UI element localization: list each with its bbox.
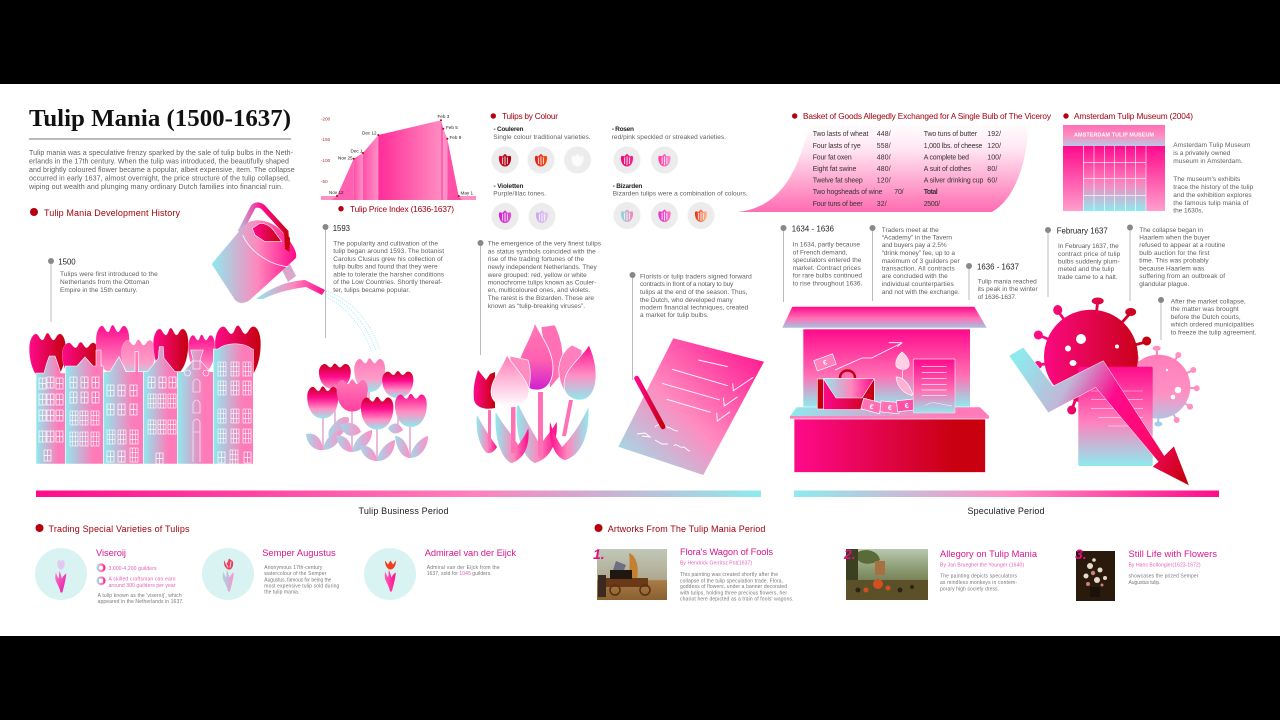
- period bar: speculative: [794, 490, 1219, 516]
- timeline: 1636-1637: Tulip mania reached: [978, 278, 1037, 286]
- title: Tulip Mania (1500-1637): [29, 105, 291, 132]
- item: admirael van der eijck: Admirael van der Eijck: [425, 548, 516, 558]
- falling arrow: [1009, 347, 1189, 486]
- timeline: 1634-1636: 1634 - 1636: [792, 225, 834, 234]
- intro text: occurred in early 1637, almost overnight, the price structure of the tulip collapsed,: [29, 175, 290, 183]
- panel: basket of goods: [738, 111, 1052, 212]
- artwork 2: as mindless monkeys in contem-: [940, 580, 1017, 586]
- period bar: tulip business: [36, 490, 761, 516]
- text: museum description: [1173, 142, 1254, 214]
- timeline: after the collapse: which ordered municipalities: [1170, 322, 1255, 328]
- text: museum description: and the exhibition explores: [1173, 192, 1252, 199]
- chart data points: [336, 119, 460, 197]
- timeline: 1593: able to tolerate the harsher conditions: [333, 271, 445, 278]
- table: left column: Twelve fat sheep: [813, 178, 863, 184]
- illustration: water drops: [326, 291, 380, 352]
- chart axis labels: -200: [321, 116, 331, 122]
- painting: allegory on tulip mania: [846, 549, 928, 600]
- briefcase: [817, 370, 874, 410]
- timeline: 1634-1636: speculators entered the: [793, 257, 862, 264]
- timeline: 1634-1636: [780, 225, 863, 302]
- timeline: traders: Traders meet at the: [882, 227, 939, 234]
- timeline: traders: transaction. All contracts: [882, 266, 955, 272]
- text: rosen: - Rosen: [612, 126, 634, 133]
- timeline: status symbols: The rarest is the Bizarden. These are: [488, 295, 594, 302]
- table: left column: [813, 131, 904, 208]
- timeline: 1636-1637: 1636 - 1637: [977, 262, 1019, 272]
- intro text: [28, 149, 295, 191]
- timeline: February 1637: trade came to a halt.: [1058, 274, 1118, 281]
- icons: colour swatches: [492, 146, 714, 230]
- timeline: 1593: ter, tulips became popular.: [333, 287, 410, 294]
- price tag and notes: €: [905, 403, 909, 410]
- timeline: status symbols: rise of the trading fortunes of the: [488, 256, 584, 263]
- panel: trading special varieties: [35, 524, 516, 605]
- pale tulip: [491, 355, 530, 407]
- table: left column: 480/: [877, 154, 891, 162]
- timeline: status symbols: en, multicoloured ones, and violets.: [488, 287, 590, 294]
- table: left column: 32/: [877, 201, 887, 208]
- price tag and notes: €: [888, 405, 892, 412]
- intro text: erlands in the 17th century. When the tulip was introduced, the beautifully shaped: [29, 158, 289, 166]
- artwork 1: [593, 546, 794, 602]
- text: couleren: - Couleren: [494, 126, 524, 133]
- heading: tulips by colour: Tulips by Colour: [502, 111, 558, 121]
- timeline: traders: [870, 225, 961, 301]
- item: viseroij: A skilled craftsman can earn: [108, 576, 176, 582]
- item: semper augustus: Augustus, famous for being the: [264, 577, 332, 583]
- table: right column: 192/: [987, 131, 1001, 138]
- item: semper augustus: [202, 548, 340, 600]
- heading: artworks: Artworks From The Tulip Mania Period: [608, 524, 765, 534]
- timeline: February 1637: meted and the tulip: [1058, 266, 1115, 273]
- table: left column: 70/: [894, 189, 904, 196]
- red tulip: [474, 370, 495, 409]
- timeline: forward contracts: [630, 272, 752, 380]
- table: right column: 80/: [987, 166, 997, 173]
- back tulip: [518, 323, 563, 390]
- page background: [0, 84, 1280, 636]
- timeline: 1634-1636: market. Contract prices: [793, 265, 861, 272]
- item: viseroij: Viseroij: [96, 548, 126, 558]
- chart date labels: Dec 1: [350, 148, 363, 154]
- timeline: collapse: suffering from an outbreak of: [1139, 273, 1225, 280]
- text: museum description: is a privately owned: [1173, 150, 1231, 157]
- timeline: traders: are concluded with the: [882, 273, 948, 280]
- timeline: traders: and not with the exchange.: [882, 289, 960, 296]
- artwork 3: [1075, 546, 1217, 601]
- timeline: status symbols: monochrome tulips known as Couler-: [488, 280, 596, 286]
- text: museum description: Amsterdam Tulip Museum: [1173, 142, 1250, 149]
- timeline: forward contracts: modern financial techniques, created: [640, 304, 749, 312]
- item: viseroij: [35, 548, 184, 605]
- text: violetten: Purple/lilac tones.: [493, 190, 546, 198]
- timeline: 1636-1637: its peak in the winter: [978, 286, 1039, 293]
- artwork 1: with tulips, holding three precious flowers, her: [680, 590, 787, 596]
- artwork 2: Allegory on Tulip Mania: [940, 549, 1038, 559]
- artwork 3: 3.: [1075, 546, 1087, 562]
- heading: price index: Tulip Price Index (1636-1637): [350, 204, 454, 214]
- timeline: after the collapse: After the market collapse,: [1171, 298, 1246, 306]
- text: bizarden: - Bizarden: [613, 183, 642, 190]
- item: semper augustus: Semper Augustus: [262, 548, 336, 558]
- period bar: speculative: Speculative Period: [968, 506, 1044, 516]
- heading: development history: Tulip Mania Development History: [44, 208, 180, 218]
- illustration: contract and pen: [618, 338, 764, 475]
- artwork 1: By Hendrick Gerritsz Pot(1637): [680, 560, 752, 566]
- large virus: [1034, 298, 1151, 414]
- timeline: 1593: Carolus Clusius grew his collection of: [333, 256, 443, 263]
- text: rosen: [612, 126, 726, 141]
- heading: museum: Amsterdam Tulip Museum (2004): [1074, 111, 1193, 121]
- timeline: forward contracts: tulips at the end of the season. Thus,: [640, 289, 747, 296]
- price tag and notes: €: [869, 404, 874, 411]
- artwork 1: This painting was created shortly after the: [680, 572, 778, 578]
- illustration: watering can: [212, 205, 325, 303]
- table: right column: Two tuns of butter: [924, 131, 978, 138]
- price tag and notes: [814, 354, 917, 414]
- artwork 3: Still Life with Flowers: [1128, 549, 1217, 559]
- painting: flora's wagon: [597, 549, 667, 600]
- timeline: status symbols: known as “tulip-breaking viruses”.: [488, 303, 585, 310]
- timeline: February 1637: bulbs suddenly plum-: [1058, 258, 1120, 266]
- chart date labels: Feb 5: [446, 125, 458, 130]
- timeline: traders: and buyers pay a 2.5%: [882, 242, 947, 249]
- timeline: 1593: 1593: [333, 224, 350, 233]
- artwork 1: 1.: [593, 546, 605, 562]
- chart axis labels: -50: [321, 179, 328, 184]
- timeline: after the collapse: [1158, 297, 1257, 340]
- timeline: 1593: tulip began around 1593. The botanist: [333, 248, 444, 255]
- small virus: [1126, 346, 1200, 426]
- chart: tulip price index: [321, 114, 476, 200]
- illustration: museum building: [1063, 125, 1165, 211]
- timeline: collapse: [1127, 224, 1226, 301]
- artwork 2: The painting depicts speculators: [940, 574, 1018, 580]
- text: violetten: - Violetten: [494, 183, 524, 190]
- artwork 2: By Jan Brueghel the Younger (1640): [940, 562, 1024, 568]
- chart axis labels: -100: [321, 158, 331, 163]
- text: museum description: trace the history of the tulip: [1173, 184, 1254, 191]
- table: right column: 60/: [987, 178, 997, 184]
- illustration: tulips behind canal houses: [29, 325, 261, 464]
- timeline: status symbols: newly independent Netherlands. They: [488, 264, 597, 271]
- text: rosen: red/pink speckled or streaked varieties.: [612, 134, 726, 141]
- intro text: Tulip mania was a speculative frenzy sparked by the sale of tulip bulbs in the Neth-: [29, 149, 294, 157]
- timeline: 1593: of the Low Countries. Shortly thereaf-: [333, 279, 442, 286]
- item: semper augustus: the tulip mania.: [264, 590, 299, 596]
- timeline: status symbols: were grouped: red, yellow or white: [487, 272, 587, 279]
- item: semper augustus: Anonymous 17th-century: [264, 565, 323, 571]
- artwork 1: goddess of flowers, under a banner decorated: [680, 584, 787, 590]
- tulip leaves: [477, 402, 589, 463]
- intro text: and brightly coloured flower became a popular, albeit expensive, item. The collapse: [29, 166, 295, 174]
- illustration: large tulips: [474, 323, 596, 463]
- table: left column: Two lasts of wheat: [813, 131, 868, 138]
- table: left column: Eight fat swine: [813, 166, 857, 173]
- item: viseroij: 3,000-4,200 guilders: [108, 566, 157, 572]
- text: couleren: [493, 126, 591, 141]
- table: left column: 448/: [877, 131, 891, 138]
- timeline: February 1637: February 1637: [1057, 227, 1108, 236]
- chart axis labels: [321, 116, 331, 184]
- timeline: traders: individual counterparties: [882, 281, 954, 288]
- item: viseroij: around 300 guilders per year: [108, 583, 176, 589]
- timeline: 1634-1636: to rise throughout 1636.: [793, 280, 863, 288]
- small tulip: [896, 352, 913, 396]
- timeline: 1593: The popularity and cultivation of the: [333, 240, 438, 247]
- item: semper augustus: watercolour of the Semper: [264, 571, 327, 577]
- chart date labels: Feb 3: [438, 114, 450, 119]
- timeline: 1636-1637: of 1636-1637.: [978, 294, 1017, 301]
- chart date labels: [329, 114, 473, 196]
- item: admirael van der eijck: Admiral van der Eijck from the: [427, 565, 500, 571]
- price tag and notes: €: [822, 359, 828, 367]
- item: admirael van der eijck: 1637, sold for 1045 guilders.: [427, 571, 492, 577]
- table: left column: Four tuns of beer: [813, 201, 863, 208]
- stall back panel: [803, 329, 970, 407]
- heading: basket of goods: Basket of Goods Allegedly Exchanged for A Single Bulb of The Viceroy: [803, 111, 1052, 121]
- timeline: collapse: Haarlem when the buyer: [1139, 234, 1211, 242]
- chart date labels: Nov 25: [338, 156, 353, 160]
- timeline: status symbols: [478, 240, 602, 355]
- chart date labels: May 1: [460, 190, 473, 196]
- item: semper augustus: most expensive tulip sold during: [264, 583, 340, 589]
- timeline: forward contracts: the Dutch, who developed many: [640, 297, 733, 304]
- timeline: after the collapse: the matter was brought: [1171, 306, 1239, 313]
- timeline: 1500: Empire in the 15th century.: [60, 287, 137, 294]
- table: right column: A silver drinking cup: [924, 178, 984, 184]
- rising trend arrow: [835, 343, 902, 370]
- timeline: February 1637: [1045, 227, 1121, 297]
- timeline: February 1637: In February 1637, the: [1058, 243, 1119, 250]
- timeline: status symbols: as status symbols coincided with the: [488, 248, 596, 256]
- stall counter: [790, 407, 989, 472]
- text: museum description: The museum's exhibits: [1173, 176, 1241, 183]
- table: left column: Four lasts of rye: [813, 143, 861, 150]
- item: viseroij: A tulip known as the 'viseroij', which: [98, 593, 182, 599]
- timeline: February 1637: contract price of tulip: [1058, 251, 1121, 258]
- timeline: after the collapse: to freeze the tulip agreement.: [1171, 330, 1257, 336]
- illustration: museum building: AMSTERDAM TULIP MUSEUM: [1074, 132, 1154, 138]
- timeline: 1636-1637: [966, 262, 1039, 301]
- timeline: collapse: because Haarlem was: [1139, 266, 1205, 272]
- chart date labels: Nov 12: [329, 190, 344, 195]
- timeline: 1634-1636: In 1634, partly because: [793, 242, 860, 248]
- table: left column: 558/: [877, 143, 891, 150]
- period bar: tulip business: Tulip Business Period: [358, 506, 448, 516]
- timeline: collapse: The collapse began in: [1139, 227, 1203, 234]
- timeline: 1593: [322, 224, 445, 338]
- timeline: 1500: [48, 258, 158, 322]
- artwork 2: porary high society dress.: [940, 586, 999, 592]
- painting: still life with flowers: [1076, 551, 1115, 601]
- artwork 1: collapse of the tulip speculation trade. Flora,: [680, 578, 783, 584]
- timeline: 1634-1636: for rare bulbs continued: [793, 272, 862, 280]
- illustration: market stall: [782, 307, 989, 472]
- panel: amsterdam tulip museum: [1063, 111, 1254, 214]
- chart axis labels: -150: [321, 137, 331, 142]
- timeline: 1500: Tulips were first introduced to the: [60, 271, 158, 278]
- text: museum description: the 1630s.: [1173, 208, 1203, 214]
- timeline: 1593: tulip bulbs and found that they were: [333, 264, 438, 271]
- panel: artworks: [593, 524, 1217, 602]
- table: right column: Total: [924, 189, 938, 196]
- falling report paper: [1078, 367, 1153, 466]
- intro text: wiping out wealth and plunging many ordinary Dutch families into financial ruin.: [28, 183, 283, 191]
- table: right column: 120/: [987, 143, 1001, 150]
- item: admirael van der eijck: [364, 548, 516, 600]
- paper on counter: [913, 359, 955, 413]
- table: right column: A suit of clothes: [924, 166, 972, 173]
- artwork 1: Flora's Wagon of Fools: [680, 547, 773, 557]
- chart date labels: Feb 9: [450, 135, 462, 140]
- text: museum description: museum in Amsterdam.: [1173, 158, 1243, 165]
- timeline: traders: maximum of 3 guilders per: [882, 258, 961, 265]
- stall roof: [782, 307, 987, 328]
- table: right column: [924, 131, 1001, 208]
- table: right column: 100/: [987, 154, 1001, 162]
- illustration: tulip field: [306, 358, 428, 461]
- timeline: collapse: bulb auction for the first: [1139, 250, 1210, 257]
- artwork 1: chariot here depicted as a train of fools' wagons.: [680, 596, 794, 602]
- text: bizarden: [613, 183, 748, 198]
- text: violetten: [493, 183, 546, 198]
- timeline: traders: “drink money” fee, up to a: [882, 250, 955, 257]
- table: left column: 480/: [877, 166, 891, 173]
- timeline: 1500: 1500: [58, 258, 76, 266]
- text: couleren: Single colour traditional varieties.: [493, 134, 591, 141]
- timeline: forward contracts: contracts in front of a notary to buy: [640, 281, 734, 288]
- heading: trading varieties: Trading Special Varieties of Tulips: [48, 524, 190, 534]
- chart area: [321, 120, 476, 200]
- illustration: crash scene: [1009, 298, 1200, 486]
- table: left column: 120/: [877, 178, 891, 184]
- timeline: collapse: glandular plague.: [1139, 281, 1189, 288]
- timeline: traders: “Academy” in the Tavern: [882, 234, 952, 242]
- timeline: collapse: time. This was probably: [1139, 258, 1209, 264]
- artwork 3: By Hans Bollongier(1623-1672): [1128, 562, 1201, 568]
- timeline: forward contracts: Florists or tulip traders signed forward: [640, 274, 752, 280]
- artwork 3: showcases the prized Semper: [1128, 574, 1199, 580]
- table: left column: Four fat oxen: [813, 154, 852, 162]
- text: bizarden: Bizarden tulips were a combination of colours.: [613, 190, 748, 198]
- artwork 2: [843, 546, 1038, 600]
- tulip stems: [488, 392, 573, 456]
- item: viseroij: appeared in the Netherlands in 1637.: [98, 599, 184, 605]
- chart date labels: Dec 12: [362, 130, 377, 136]
- timeline: after the collapse: before the Dutch courts,: [1171, 314, 1241, 321]
- table: left column: Two hogsheads of wine: [813, 189, 883, 196]
- table: right column: 2500/: [924, 201, 940, 208]
- timeline: 1634-1636: of French demand,: [793, 250, 848, 256]
- timeline: status symbols: The emergence of the very finest tulips: [488, 240, 602, 248]
- artwork 2: 2.: [843, 546, 856, 562]
- timeline: collapse: refused to appear at a routine: [1139, 242, 1226, 249]
- timeline: 1500: Netherlands from the Ottoman: [60, 279, 150, 286]
- table: right column: 1,000 lbs. of cheese: [924, 143, 983, 150]
- table: right column: A complete bed: [924, 154, 969, 162]
- timeline: forward contracts: a market for tulip bulbs.: [640, 312, 709, 319]
- text: museum description: the famous tulip mania of: [1173, 200, 1248, 207]
- panel: tulips by colour: [491, 111, 748, 230]
- curved ribbon background: [738, 124, 1028, 212]
- artwork 3: Augustus tulip.: [1128, 580, 1160, 586]
- right tulip: [559, 345, 596, 400]
